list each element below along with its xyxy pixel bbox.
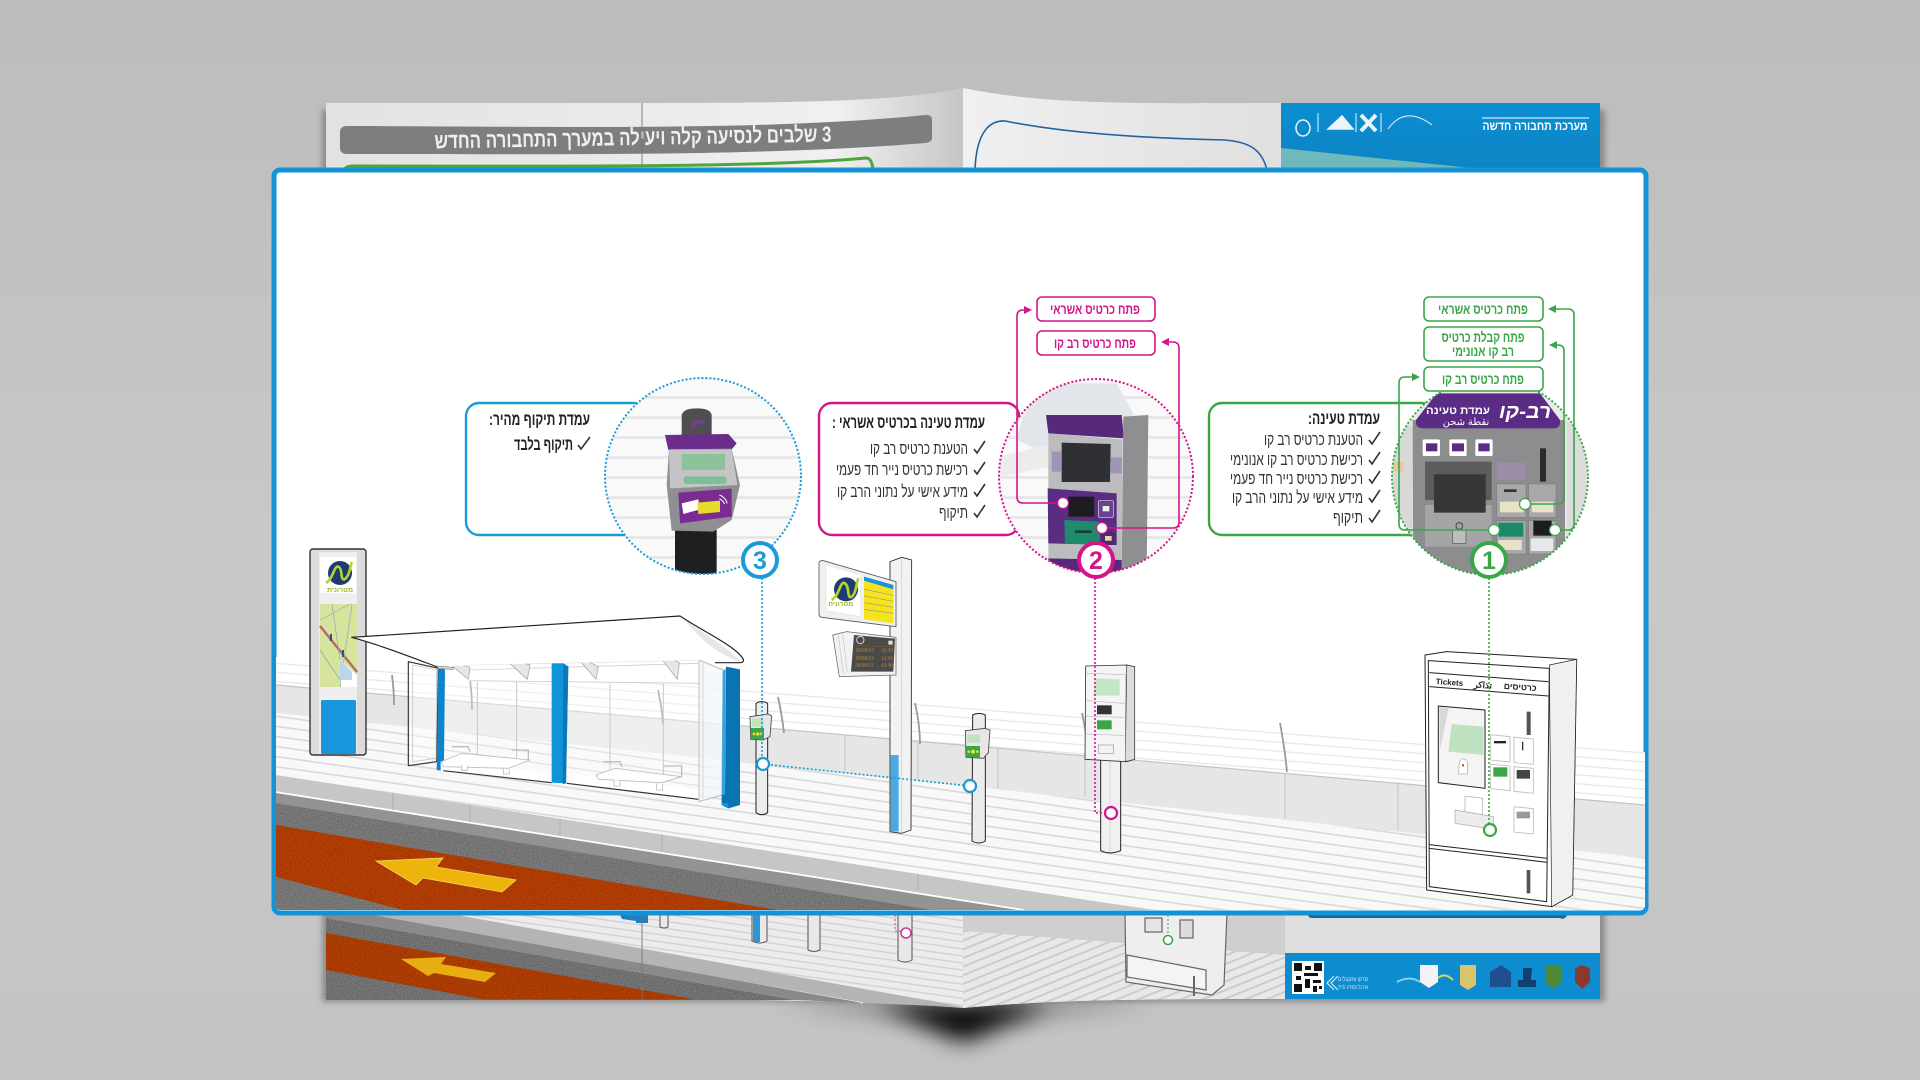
callout text: מידע אישי על נתוני הרב קו [837, 482, 968, 501]
label: rav-kav slot: פתח כרטיס רב קו [1442, 371, 1524, 387]
machine header labels [1436, 678, 1536, 691]
brochure blue tab under panel [1307, 913, 1569, 919]
brand text on stand [1426, 401, 1551, 428]
sign board: מטרונית [828, 601, 853, 608]
blue panel [321, 700, 356, 754]
callout box [1209, 403, 1434, 535]
dotted link 3 [762, 578, 970, 786]
glass mullions [477, 682, 663, 780]
callout text [489, 410, 590, 454]
header logos [1296, 113, 1432, 136]
sign logo [834, 577, 858, 601]
label: anonymous card slot: רב קו אנונימי [1452, 343, 1514, 359]
brochure light area [1285, 913, 1600, 953]
right glass [699, 660, 723, 802]
municipal logos [1397, 965, 1590, 990]
ticket machine [1425, 652, 1577, 907]
callout text [832, 413, 985, 522]
badge 3: 3 [753, 547, 767, 575]
machine screen [1438, 706, 1485, 788]
tall info pole [819, 557, 912, 833]
bench left [442, 747, 530, 774]
platform scene [276, 549, 1645, 911]
right page [963, 88, 1600, 1008]
left glass door [408, 662, 438, 766]
validator pole middle [965, 713, 990, 843]
shelter [352, 616, 743, 808]
shelter glass [444, 681, 698, 786]
callout text: הטענת כרטיס רב קו [870, 439, 968, 458]
brochure blue pole strip [753, 915, 760, 942]
brochure green box top [343, 158, 873, 172]
brochure blue header [1281, 103, 1600, 168]
dotted link 2 [1095, 578, 1105, 813]
callout text [1230, 409, 1380, 527]
callout text: עמדת תיקוף מהיר: [489, 410, 590, 429]
callout text: עמדת טעינה: [1308, 409, 1380, 428]
dotted link 1 [1488, 578, 1490, 826]
panel: credit card charging stand [819, 297, 1193, 577]
white header band [445, 674, 631, 682]
panel: charging stand [1209, 297, 1589, 580]
badge 1 [1472, 543, 1506, 577]
ceiling [468, 660, 698, 666]
label: credit card slot: פתח כרטיס אשראי [1438, 301, 1528, 317]
charge pole [1085, 665, 1135, 853]
footer note: סרקו ומקבלים [1338, 975, 1368, 983]
white floor band [440, 768, 698, 797]
badge 2: 2 [1089, 547, 1103, 575]
callout text: מידע אישי על נתוני הרב קו [1232, 488, 1363, 507]
label: credit card slot [1037, 297, 1155, 321]
label: credit card slot: פתח כרטיס אשראי [1050, 301, 1140, 317]
brochure pink ring [895, 915, 911, 938]
ticket tray [1455, 796, 1493, 829]
arrow to credit card slot label [1017, 306, 1068, 508]
photo: charging stand [1391, 378, 1589, 580]
callout text: הטענת כרטיס רב קו [1264, 430, 1363, 449]
arrow to rav-kav slot label [1096, 338, 1179, 534]
gravel [276, 803, 932, 910]
brochure lower left scene [326, 103, 964, 1007]
callout text: עמדת טעינה בכרטיס אשראי : [832, 413, 985, 432]
fence posts [392, 675, 1287, 772]
validator pole left [750, 702, 772, 815]
label: credit card slot [1424, 297, 1543, 321]
left page [326, 88, 963, 1008]
header title: מערכת תחבורה חדשה [1482, 119, 1588, 133]
brochure footer [1285, 953, 1600, 999]
machine header labels: כרטיסים [1503, 681, 1537, 693]
dark kerb [276, 793, 1024, 911]
roof [352, 616, 743, 669]
badge 1: 1 [1482, 547, 1496, 575]
label: anonymous card slot [1424, 327, 1543, 361]
photo: credit card stand [999, 379, 1193, 573]
qr code [1292, 961, 1324, 994]
teal pointer lines [762, 578, 1489, 826]
floor [276, 713, 1645, 910]
back fence [276, 657, 1645, 806]
low wall [276, 685, 1645, 858]
timetable display: 26/05/13 11:30 [856, 648, 893, 653]
photo: validator [604, 378, 802, 577]
label: anonymous card slot: פתח קבלת כרטיס [1442, 329, 1524, 345]
timetable display [833, 632, 896, 677]
logo: מטרונית [327, 587, 353, 594]
main panel [274, 170, 1646, 913]
brochure shelter stub [620, 915, 648, 923]
page crease [641, 103, 643, 999]
brochure arrow [401, 957, 496, 982]
callout text: רכישת כרטיס נייר חד פעמי [1230, 469, 1363, 488]
callout box [819, 403, 1019, 535]
brochure blue outline [975, 121, 1267, 170]
bench right [596, 762, 682, 790]
machine controls [1491, 712, 1533, 834]
fins [452, 660, 680, 680]
brochure lower right scene [963, 913, 1285, 1008]
arrow to rav-kav label [1399, 373, 1500, 536]
map [320, 604, 357, 687]
callout text: תיקוף [939, 503, 968, 522]
arrow to credit card label [1548, 305, 1574, 536]
brochure shadow [322, 110, 1605, 1042]
logo [326, 561, 353, 594]
blue posts [437, 663, 740, 808]
chevrons [1327, 976, 1338, 990]
callout text: רכישת כרטיס נייר חד פעמי [836, 460, 968, 479]
callout text: רכישת כרטיס רב קו אנונימי [1230, 450, 1363, 469]
brochure behind panel [322, 88, 1605, 1042]
brand text on stand: نقطة شحن [1443, 417, 1489, 428]
timetable display: 26/05/13 12:30 [856, 655, 894, 660]
machine header labels: تذاكر [1472, 679, 1493, 692]
curb [276, 775, 1152, 910]
red lane [276, 825, 777, 910]
brochure title bar: 3 שלבים לנסיעה קלה ויעילה במערך התחבורה החדש [434, 122, 832, 153]
brand text on stand: עמדת טעינה [1426, 405, 1490, 417]
ring markers [757, 758, 1496, 836]
badge 3 [743, 543, 777, 577]
label: rav-kav slot: פתח כרטיס רב קו [1054, 335, 1136, 351]
map totem [310, 549, 366, 755]
brand text on stand: רב-קו [1499, 401, 1551, 423]
callout text: תיקוף בלבד [514, 435, 573, 454]
callout box [466, 403, 646, 535]
brochure ticket machine [1125, 913, 1227, 996]
panel: quick validation stand [466, 378, 802, 577]
bottom line [443, 771, 698, 799]
timetable display: 26/05/13 13:30 [855, 662, 893, 667]
footer note: את כל המידע לנייד [1338, 983, 1368, 991]
callout text: תיקוף [1333, 508, 1363, 527]
arrow to anonymous card label [1520, 341, 1564, 510]
direction arrow [376, 858, 516, 892]
badge 2 [1079, 543, 1113, 577]
brochure pole stubs [660, 915, 912, 962]
machine header labels: Tickets [1436, 677, 1464, 688]
footer note [1338, 975, 1368, 991]
label: rav-kav slot [1424, 367, 1543, 391]
label: rav-kav slot [1037, 331, 1155, 355]
sign board [819, 561, 896, 627]
